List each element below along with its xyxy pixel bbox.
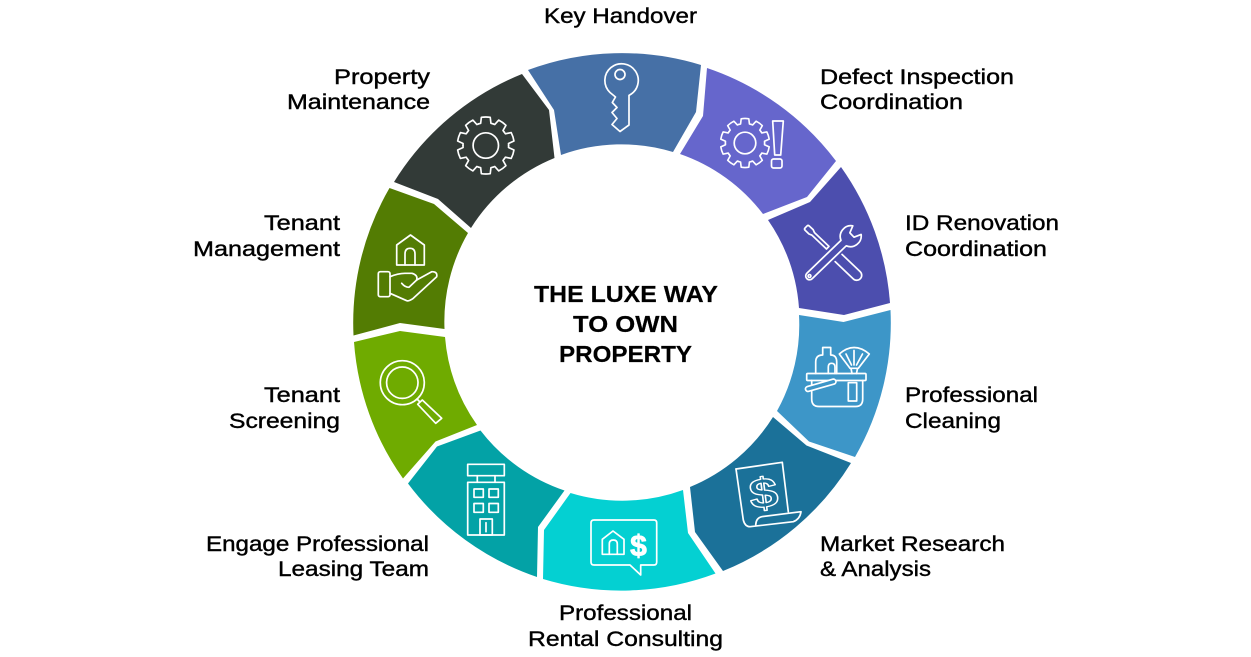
panel: ID renovation segment [768, 167, 890, 315]
label: tenant screening: Tenant [264, 384, 340, 407]
icon: office building [468, 464, 504, 535]
panel: market research segment [690, 417, 851, 571]
title [534, 281, 718, 367]
panel: professional rental consulting segment [543, 490, 716, 591]
panel: tenant screening segment [354, 331, 477, 478]
label: defect inspection coordination: Coordination [820, 91, 963, 114]
label: tenant screening: Screening [229, 410, 340, 433]
label: professional cleaning: Cleaning [905, 410, 1001, 433]
icon: gear and exclamation mark [720, 118, 783, 168]
panel: tenant management segment [353, 188, 468, 336]
label: tenant management: Management [193, 238, 340, 261]
label: engage professional leasing team: Engage Professional [206, 533, 429, 556]
icon: hand holding house [378, 235, 437, 301]
label: property maintenance: Maintenance [287, 91, 430, 114]
label: market research and analysis: & Analysis [820, 558, 931, 581]
icon: house and dollar speech bubble: $ [630, 530, 647, 563]
title: THE LUXE WAY [534, 281, 718, 307]
label: defect inspection coordination: Defect Inspection [820, 66, 1014, 89]
label: professional cleaning: Professional [905, 384, 1038, 407]
icon: wrench and screwdriver [800, 223, 864, 286]
icon: house and dollar speech bubble [591, 520, 657, 575]
label: tenant management [193, 212, 340, 261]
panel: property maintenance segment [394, 74, 554, 228]
label: defect inspection coordination [820, 66, 1014, 114]
label: ID renovation coordination [905, 212, 1059, 261]
label: property maintenance: Property [334, 66, 431, 89]
label: engage professional leasing team [206, 533, 429, 581]
panel: engage professional leasing team segment [408, 430, 564, 577]
panel: defect inspection segment [680, 68, 836, 214]
title: TO OWN [573, 311, 678, 337]
label: tenant screening [229, 384, 340, 433]
label: key handover: Key Handover [544, 5, 697, 28]
icon: magnifying glass [380, 361, 442, 423]
label: engage professional leasing team: Leasing Team [278, 558, 429, 581]
panel: key handover segment [528, 53, 701, 155]
label: market research and analysis [820, 533, 1005, 581]
label: professional cleaning [905, 384, 1038, 433]
label: market research and analysis: Market Research [820, 533, 1005, 556]
icon: cleaning bucket with bottle and brush [805, 348, 869, 406]
label: professional rental consulting: Rental Consulting [528, 628, 723, 651]
icon: gear [457, 117, 515, 174]
label: tenant management: Tenant [264, 212, 340, 235]
label: professional rental consulting [528, 602, 723, 651]
label: property maintenance [287, 66, 431, 114]
label: ID renovation coordination: ID Renovation [905, 212, 1059, 235]
label: professional rental consulting: Professional [559, 602, 692, 625]
icon: dollar document [736, 462, 801, 527]
label: ID renovation coordination: Coordination [905, 238, 1047, 261]
panel: professional cleaning segment [777, 310, 891, 457]
icon: dollar document: $ [746, 468, 780, 518]
title: PROPERTY [559, 341, 692, 367]
icon: key [605, 64, 638, 132]
